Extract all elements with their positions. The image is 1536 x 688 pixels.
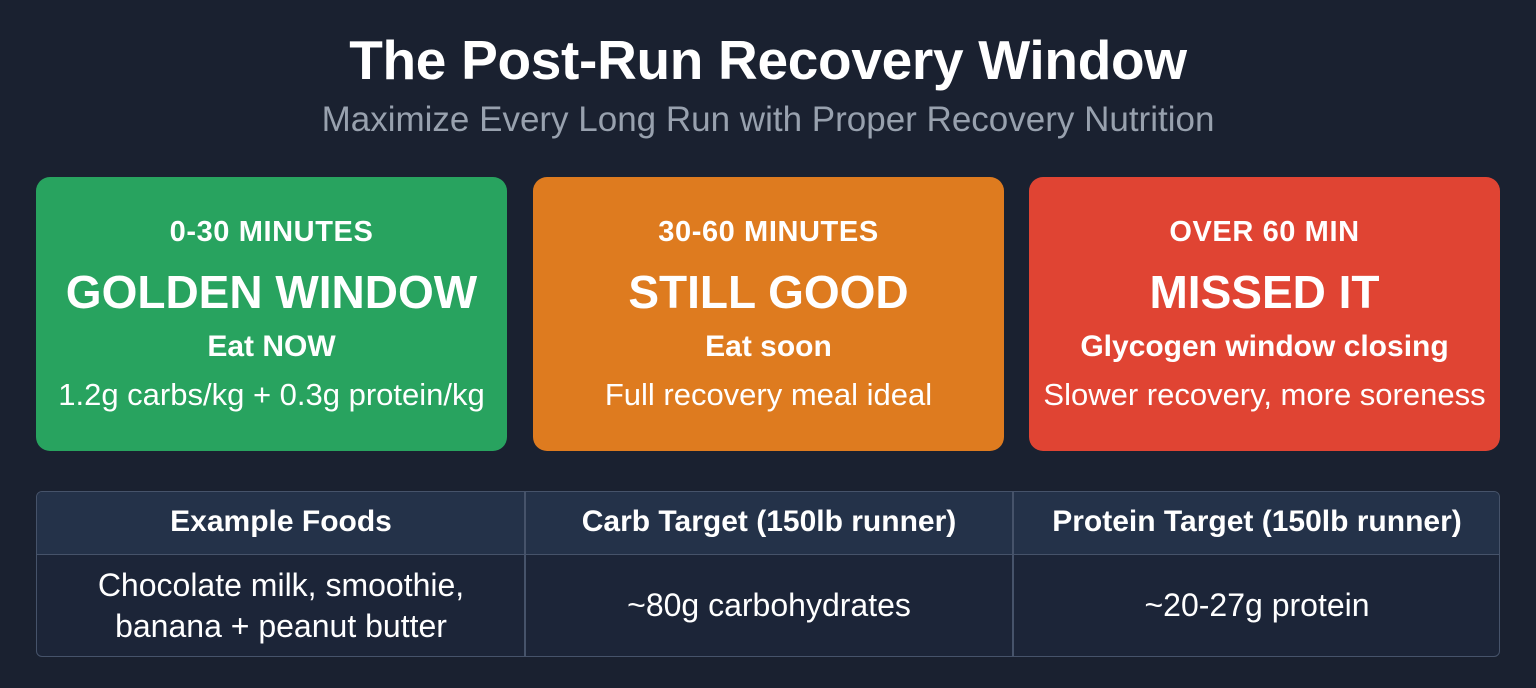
panel: still good: 30-60 MINUTES	[658, 216, 879, 248]
table cell: foods: Chocolate milk, smoothie,	[98, 567, 464, 603]
panel: missed it: Slower recovery, more soreness	[1043, 377, 1486, 412]
table cell: foods: banana + peanut butter	[115, 608, 447, 644]
panel: still good: Eat soon	[705, 330, 832, 363]
table cell: foods	[98, 567, 464, 644]
panel: missed it	[1029, 177, 1500, 451]
panel: still good: Full recovery meal ideal	[605, 377, 932, 412]
panel: golden window: 0-30 MINUTES	[170, 216, 373, 248]
panel: golden window: 1.2g carbs/kg + 0.3g protein/kg	[58, 377, 485, 412]
table cell: protein: ~20-27g protein	[1144, 587, 1370, 623]
title: The Post-Run Recovery Window	[349, 29, 1187, 91]
panel: golden window: Eat NOW	[207, 330, 336, 363]
subtitle: Maximize Every Long Run with Proper Recovery Nutrition	[322, 100, 1214, 139]
table header: example foods: Example Foods	[170, 505, 392, 538]
table cell: carbs: ~80g carbohydrates	[627, 587, 911, 623]
table	[36, 491, 1500, 657]
table header: carb target: Carb Target (150lb runner)	[582, 505, 956, 538]
panel: missed it: MISSED IT	[1149, 266, 1380, 318]
panel: still good	[533, 177, 1004, 451]
panel: still good: STILL GOOD	[628, 266, 909, 318]
panel: missed it: Glycogen window closing	[1080, 330, 1449, 363]
table header: protein target: Protein Target (150lb runner)	[1052, 505, 1462, 538]
panel: golden window	[36, 177, 507, 451]
panel: golden window: GOLDEN WINDOW	[66, 266, 477, 318]
panel: missed it: OVER 60 MIN	[1169, 216, 1360, 248]
